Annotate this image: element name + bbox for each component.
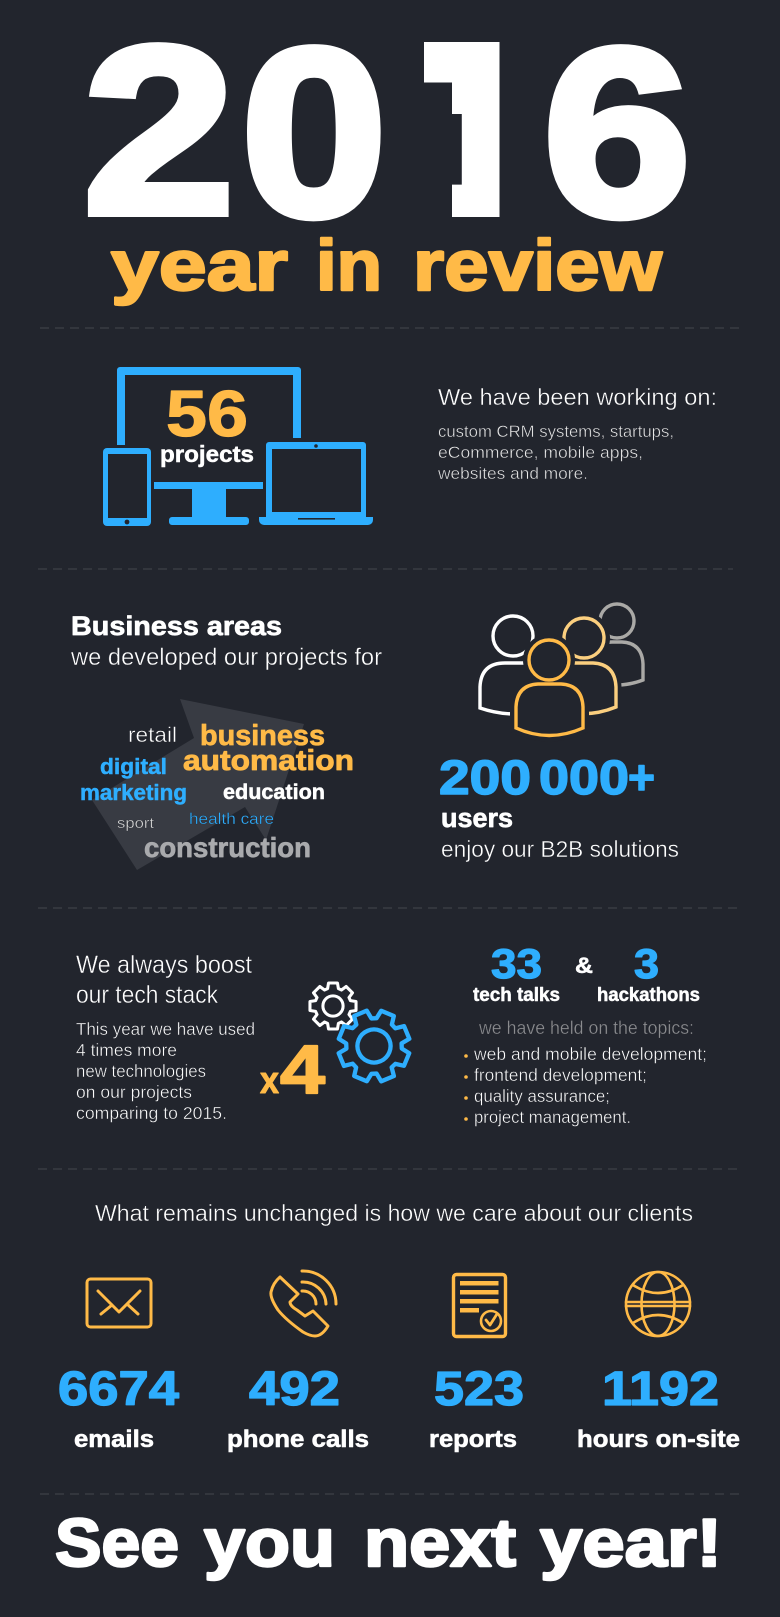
stat: 492 phone calls: [227, 1363, 369, 1453]
closing: see you next year: See: [55, 1505, 179, 1581]
word cloud: business areas: retail: [128, 724, 177, 747]
ampersand: &: [575, 953, 593, 978]
stat: 200 000+ users: +: [628, 752, 655, 805]
stat: 33 tech talks: 33: [491, 940, 542, 987]
text block: working on: eCommerce, mobile apps,: [438, 444, 643, 462]
stat: 200 000+ users: 200: [439, 752, 531, 805]
text block: tech stack: comparing to 2015.: [76, 1103, 227, 1123]
title: 2016: [88, 42, 686, 222]
list: topics: web and mobile development;: [473, 1044, 707, 1064]
heading: business areas: [70, 611, 382, 671]
subtitle: year in review: in: [316, 227, 382, 306]
word cloud: business areas: business: [200, 720, 325, 752]
person: light orange: [552, 618, 616, 714]
stat: 6674 emails: emails: [74, 1426, 154, 1453]
stat: 523 reports: [429, 1363, 524, 1453]
stat: 492 phone calls: 492: [249, 1363, 340, 1416]
text block: working on: websites and more.: [437, 465, 588, 483]
icon: desktop monitor: [117, 367, 301, 525]
subtitle: year in review: year: [111, 227, 288, 306]
subtitle: year in review: review: [413, 227, 663, 306]
closing: see you next year: next: [364, 1505, 516, 1581]
icon: envelope: [87, 1279, 151, 1327]
text block: working on: We have been working on:: [438, 384, 717, 410]
stat: 6674 emails: [58, 1363, 179, 1453]
text: topics intro: we have held on the topics:: [478, 1018, 694, 1038]
person: grey: [591, 604, 643, 685]
list: topics: frontend development;: [474, 1065, 647, 1085]
stat: 3 hackathons: [597, 940, 700, 1006]
heading: business areas: we developed our projects for: [70, 644, 382, 671]
label: projects: projects: [160, 441, 254, 467]
icon: laptop: [259, 442, 373, 525]
list: topics: project management.: [474, 1107, 631, 1127]
stat: 1192 hours on-site: 1192: [602, 1363, 719, 1416]
word cloud: business areas: [80, 699, 354, 870]
icon: globe: [626, 1272, 690, 1336]
closing: see you next year: year!: [540, 1505, 722, 1581]
word cloud: business areas: automation: [183, 745, 354, 777]
stat: x4: x: [260, 1060, 279, 1102]
list: topics: quality assurance;: [474, 1086, 610, 1106]
title: 2016: 2: [83, 0, 235, 264]
text block: tech stack: our tech stack: [76, 981, 218, 1009]
word cloud: business areas: construction: [144, 832, 311, 863]
stat: 523 reports: reports: [429, 1426, 517, 1453]
text block: working on: custom CRM systems, startups,: [438, 423, 674, 441]
person: white: [480, 616, 550, 714]
text block: tech stack: on our projects: [76, 1082, 192, 1102]
title: 2016: 0: [241, 0, 387, 266]
text block: tech stack: [76, 951, 255, 1123]
list: topics: [464, 1044, 707, 1127]
heading: business areas: Business areas: [71, 611, 282, 641]
text block: tech stack: We always boost: [76, 951, 252, 979]
closing: see you next year: you: [204, 1505, 335, 1581]
text block: working on: [437, 384, 717, 483]
stat: x4: 4: [280, 1031, 325, 1108]
background arrow: [92, 699, 304, 870]
icon: phone: [271, 1271, 336, 1336]
title: 2016: 1: [414, 1, 547, 268]
stat: 33 tech talks: [473, 940, 560, 1006]
stat: x4: [260, 1031, 325, 1108]
icon: report document: [454, 1274, 506, 1336]
stat: 3 hackathons: 3: [634, 940, 659, 987]
word cloud: business areas: digital: [100, 754, 167, 779]
word cloud: business areas: marketing: [80, 780, 187, 805]
heading: clients: What remains unchanged is how we care about our clients: [95, 1200, 693, 1226]
person: orange front: [516, 640, 583, 736]
stat: 200 000+ users: [439, 752, 679, 862]
stat: 523 reports: 523: [434, 1363, 524, 1416]
stat: 200 000+ users: 000: [539, 752, 629, 805]
icon: group of users: [480, 604, 643, 736]
stat: 200 000+ users: enjoy our B2B solutions: [441, 836, 679, 862]
stat: 33 tech talks: tech talks: [473, 985, 560, 1006]
icon: devices with 56 projects: [103, 367, 373, 526]
text block: tech stack: new technologies: [76, 1061, 206, 1081]
stat: 200 000+ users: users: [441, 803, 513, 833]
word cloud: business areas: sport: [117, 815, 155, 832]
word cloud: business areas: health care: [189, 811, 274, 828]
stat: 1192 hours on-site: [577, 1363, 740, 1453]
icon: small white gear: [310, 983, 356, 1029]
icon: gears: [310, 983, 420, 1092]
stat: 6674 emails: 6674: [58, 1363, 179, 1416]
stat: 492 phone calls: phone calls: [227, 1426, 369, 1453]
icon: large blue gear: [328, 1000, 420, 1092]
text block: tech stack: 4 times more: [76, 1040, 177, 1060]
icon: tablet: [103, 448, 151, 526]
stat: 1192 hours on-site: hours on-site: [577, 1426, 740, 1453]
text block: tech stack: This year we have used: [76, 1019, 255, 1039]
word cloud: business areas: education: [223, 781, 325, 804]
title: 2016: 6: [543, 0, 691, 266]
closing: see you next year: [55, 1505, 722, 1581]
stat: 3 hackathons: hackathons: [597, 985, 700, 1006]
stat: 56: 56: [166, 377, 248, 450]
subtitle: year in review: [111, 227, 663, 306]
